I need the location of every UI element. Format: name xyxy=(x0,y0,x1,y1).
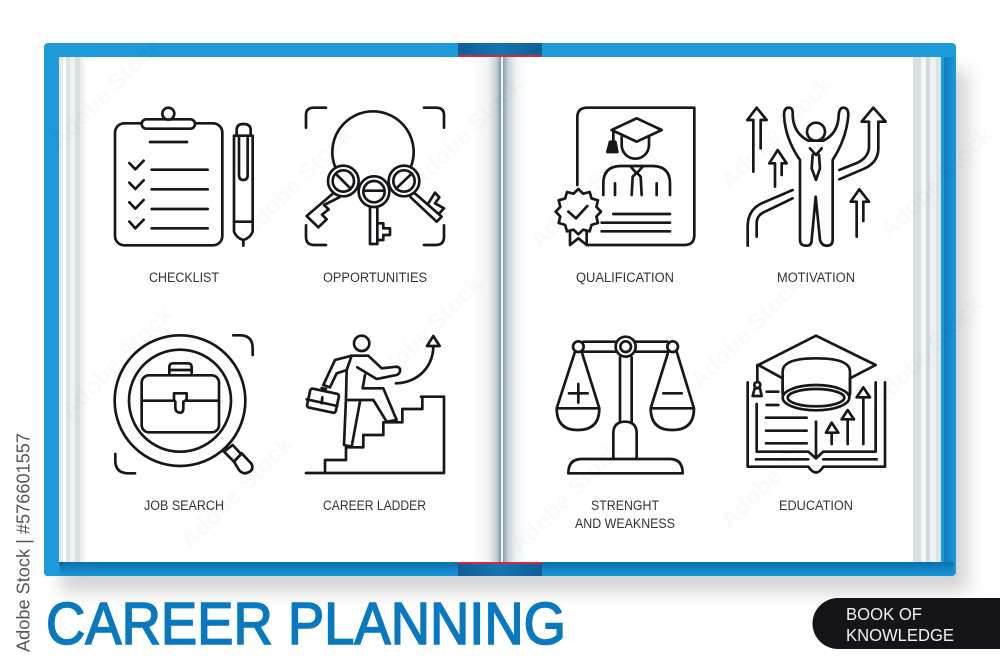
icon: magnifier with briefcase xyxy=(115,335,253,473)
badge: book of knowledge: KNOWLEDGE xyxy=(846,625,954,645)
label: qualification: QUALIFICATION xyxy=(576,270,674,285)
panel: motivation xyxy=(747,108,886,285)
panel: qualification xyxy=(556,108,694,285)
stock id caption: Adobe Stock | #576601557 xyxy=(12,433,34,652)
panel: checklist xyxy=(115,108,253,285)
icon: person climbing stairs xyxy=(306,336,444,473)
book shadow xyxy=(60,70,968,592)
icon: person with rising arrows xyxy=(747,108,886,246)
title: CAREER PLANNING xyxy=(46,591,566,657)
panel: strength and weakness xyxy=(557,337,694,531)
icon: certificate with graduate xyxy=(556,108,694,245)
label: checklist: CHECKLIST xyxy=(149,270,219,285)
icon: balance scales xyxy=(557,337,694,473)
panel: opportunities xyxy=(306,108,444,285)
badge: book of knowledge xyxy=(813,598,1000,649)
panel: job search xyxy=(115,335,253,513)
icon: book and graduation cap xyxy=(748,336,885,472)
book cover xyxy=(44,43,956,576)
label: career ladder: CAREER LADDER xyxy=(323,498,426,513)
label: strength and weakness xyxy=(575,498,675,531)
icon: clipboard and pen xyxy=(115,108,253,246)
label: strength and weakness: STRENGHT xyxy=(591,498,659,513)
icon: key ring xyxy=(306,108,444,245)
label: opportunities: OPPORTUNITIES xyxy=(323,270,427,285)
label: job search: JOB SEARCH xyxy=(144,498,224,513)
open book pages xyxy=(59,57,941,562)
panel: career ladder xyxy=(306,336,444,513)
label: education: EDUCATION xyxy=(779,498,853,513)
panel: education xyxy=(748,336,885,513)
label: motivation: MOTIVATION xyxy=(777,270,855,285)
label: strength and weakness: AND WEAKNESS xyxy=(575,516,675,531)
spine ribbon band xyxy=(458,43,542,576)
badge: book of knowledge: BOOK OF xyxy=(846,604,922,624)
